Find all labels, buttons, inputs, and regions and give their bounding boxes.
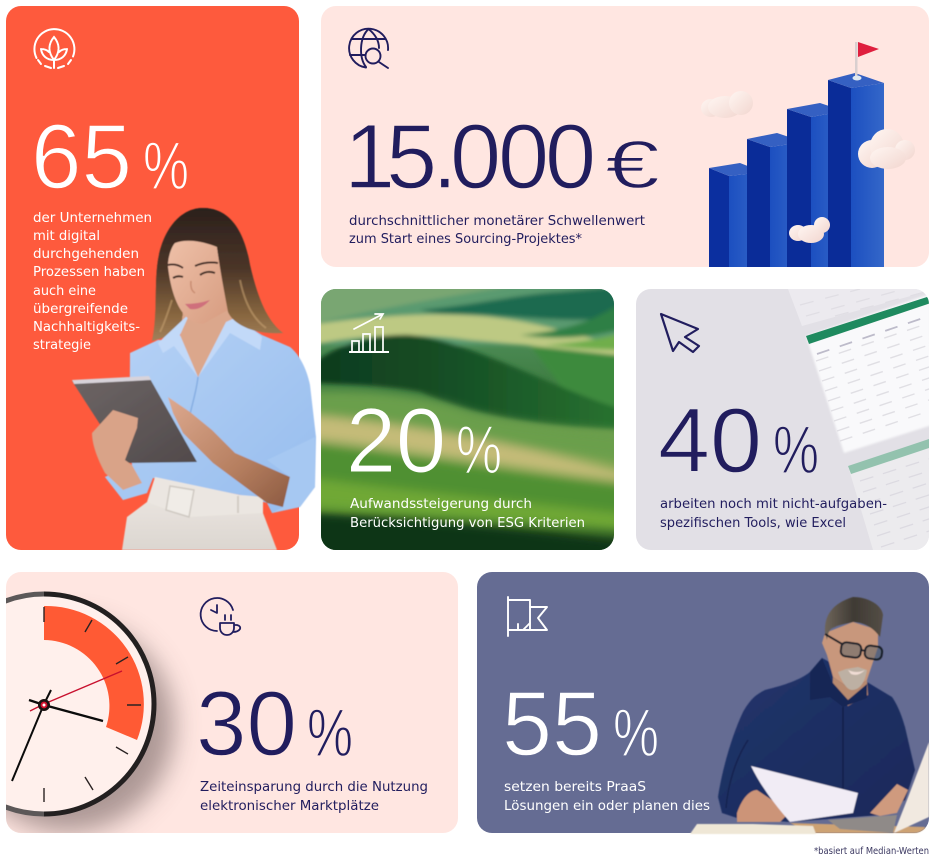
text: 65 % description: Prozessen haben xyxy=(33,264,145,280)
icon: leaf in circle xyxy=(34,29,74,68)
icon: red flag xyxy=(852,42,879,80)
number: 20 %: % xyxy=(456,412,502,488)
number: 20 %: 20 xyxy=(346,390,446,492)
text: 40 % description xyxy=(660,496,887,531)
text: 30 % description: Zeiteinsparung durch die Nutzung xyxy=(200,779,428,795)
icon: mouse cursor xyxy=(661,314,699,352)
illustration: wall clock xyxy=(0,594,174,832)
text: 15.000 € description xyxy=(349,213,645,247)
text: 65 % description: auch eine xyxy=(33,283,96,299)
number: 65 % xyxy=(31,106,189,208)
panel: 65 % Nachhaltigkeitsstrategie xyxy=(6,6,316,550)
text: 55 % description: setzen bereits PraaS xyxy=(504,779,646,795)
icon: flag with check xyxy=(508,597,547,636)
text: 15.000 € description: zum Start eines Sourcing-Projektes* xyxy=(349,231,582,247)
illustration: 3D bar chart with flag and clouds xyxy=(701,42,915,267)
text: 30 % description xyxy=(200,779,428,814)
icon: clock with coffee cup xyxy=(201,598,240,635)
panel: 20 % Aufwandssteigerung (green landscape) xyxy=(321,289,614,550)
number: 65 %: % xyxy=(143,128,189,204)
text: 40 % description: arbeiten noch mit nicht-aufgaben- xyxy=(660,496,887,512)
text: 40 % description: spezifischen Tools, wie Excel xyxy=(660,515,846,531)
text: 20 % description: Aufwandssteigerung durch xyxy=(350,496,532,512)
text: 20 % description xyxy=(350,496,585,531)
number: 40 %: % xyxy=(773,412,819,488)
text: 55 % description: Lösungen ein oder planen dies xyxy=(504,798,710,814)
number: 40 %: 40 xyxy=(658,390,762,492)
number: 15.000 €: 15.000 xyxy=(344,106,596,208)
image: rolling green hills xyxy=(321,289,614,550)
number: 65 %: 65 xyxy=(31,106,132,208)
panel: 30 % Zeiteinsparung xyxy=(0,572,458,833)
clouds xyxy=(701,91,915,243)
illustration: woman with tablet xyxy=(72,208,316,550)
text: 15.000 € description: durchschnittlicher monetärer Schwellenwert xyxy=(349,213,645,229)
number: 40 % xyxy=(658,390,819,492)
text: 65 % description: durchgehenden xyxy=(33,246,139,262)
text: 55 % description xyxy=(504,779,710,814)
number: 30 %: % xyxy=(307,695,353,771)
text: 65 % description: strategie xyxy=(33,337,91,353)
text: 65 % description: der Unternehmen xyxy=(33,210,152,226)
number: 55 %: 55 xyxy=(502,673,602,775)
text: 65 % description: mit digital xyxy=(33,228,100,244)
illustration: man with papers and laptop xyxy=(690,597,929,834)
number: 55 % xyxy=(502,673,659,775)
panel: 40 % Excel xyxy=(636,289,935,560)
number: 55 %: % xyxy=(613,695,659,771)
illustration: spreadsheets xyxy=(788,289,935,560)
text: 65 % description xyxy=(33,210,152,353)
number: 20 % xyxy=(346,390,502,492)
panel: 15.000 € Schwellenwert xyxy=(321,6,929,267)
text: 30 % description: elektronischer Marktplätze xyxy=(200,798,379,814)
number: 30 % xyxy=(196,673,353,775)
text: 20 % description: Berücksichtigung von ESG Kriterien xyxy=(350,515,585,531)
text: 65 % description: übergreifende xyxy=(33,301,128,317)
number: 30 %: 30 xyxy=(196,673,297,775)
number: 15.000 €: € xyxy=(605,127,660,203)
icon: rising bar chart xyxy=(349,314,389,352)
text: 65 % description: Nachhaltigkeits- xyxy=(33,319,140,335)
icon: globe with magnifier xyxy=(349,29,388,68)
panel: 55 % PraaS xyxy=(477,572,929,834)
